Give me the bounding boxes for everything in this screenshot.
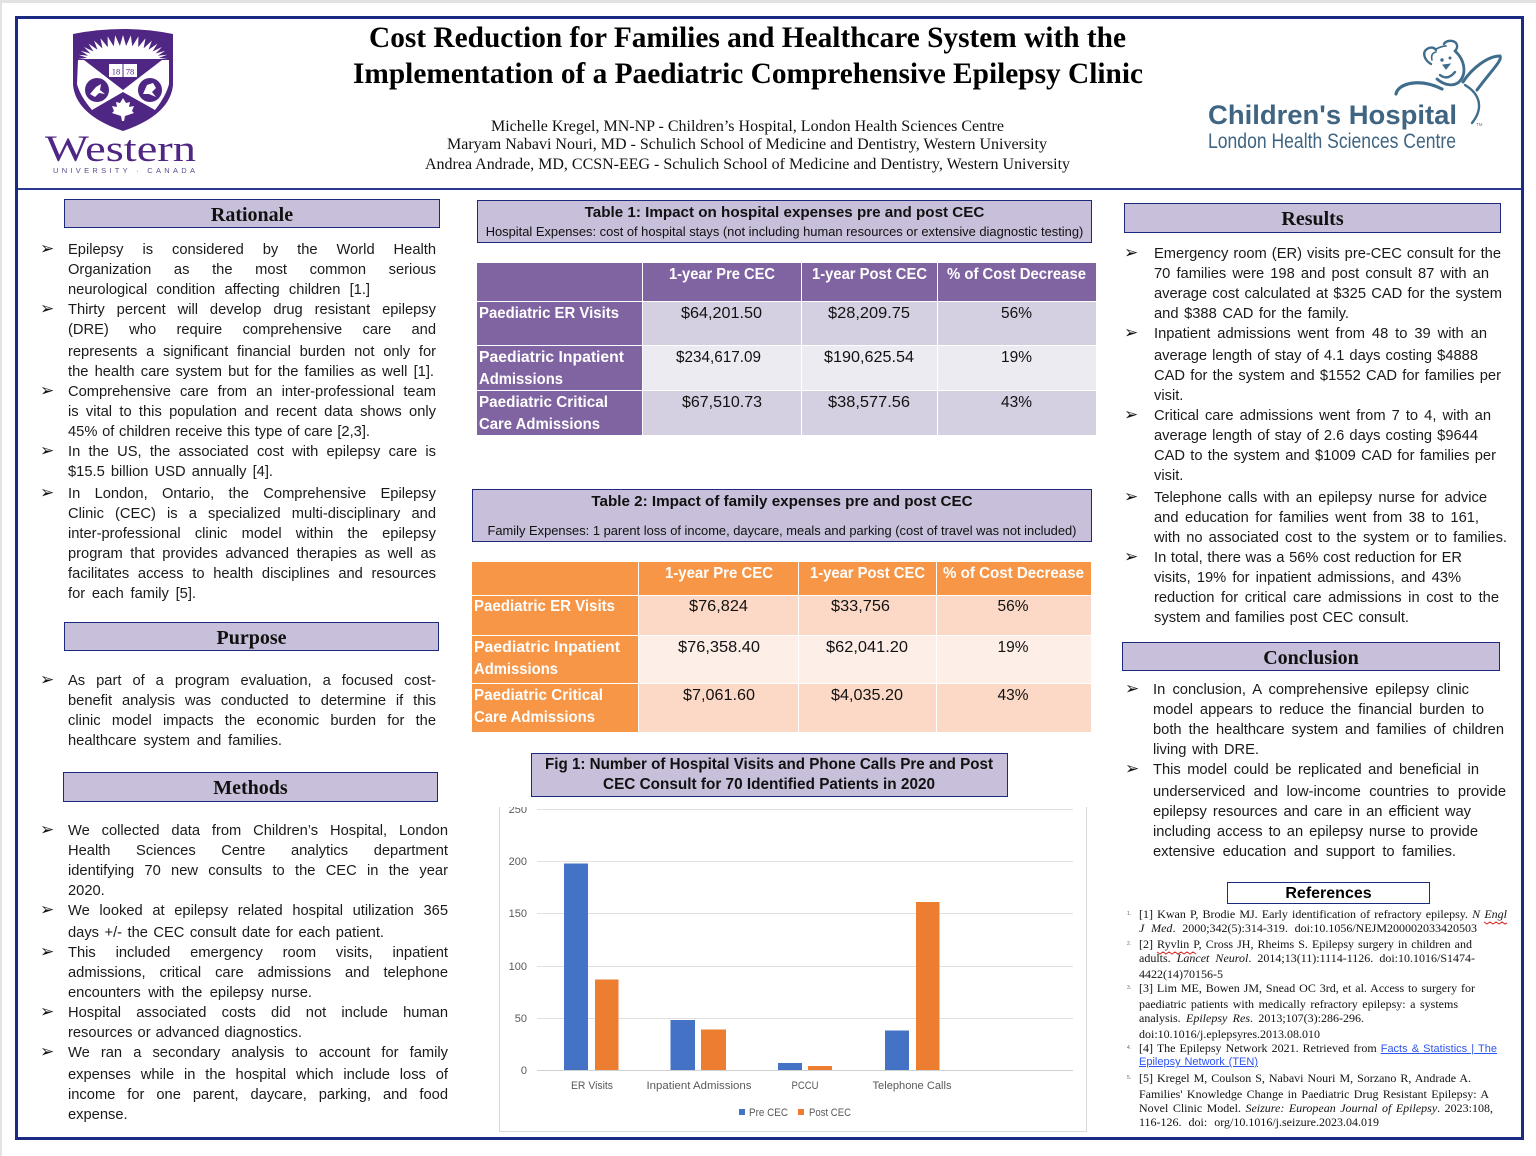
rationale bullet list: facilitates access to health disciplines and resources (68, 566, 436, 582)
table 1 row: inpatient admissions (479, 349, 1032, 388)
bar chart: hospital visits and phone calls (499, 804, 1087, 1132)
conclusion bullet list: ➢ (1125, 759, 1139, 779)
conclusion bullet list: In conclusion, A comprehensive epilepsy clinic (1153, 682, 1469, 698)
purpose bullet list: As part of a program evaluation, a focused cost- (68, 673, 436, 689)
reference list: adults. Lancet Neurol. 2014;13(11):1114-1126. doi:10.1016/S1474- (1139, 951, 1475, 965)
authors: Michelle Kregel, MN-NP - Children’s Hospital, London Health Sciences Centre (491, 118, 1004, 135)
methods bullet list: ➢ (40, 1042, 54, 1062)
table 1 header row (669, 266, 1086, 283)
results bullet list (1124, 243, 1507, 626)
reference list: 1. (1127, 911, 1131, 917)
authors: Maryam Nabavi Nouri, MD - Schulich School of Medicine and Dentistry, Western University (447, 136, 1047, 153)
results bullet list: average length of stay of 2.6 days costing $9644 (1154, 428, 1478, 444)
logo: Western University (45, 29, 196, 175)
conclusion bullet list: living with DRE. (1153, 742, 1259, 758)
table 2 row: inpatient admissions: Admissions (474, 661, 558, 678)
results bullet list: with no associated cost to the system or to families. (1154, 530, 1507, 546)
trademark: TM (1476, 122, 1483, 127)
heading: rationale: Rationale (211, 204, 293, 226)
table 1 row: inpatient admissions: Admissions (479, 371, 563, 388)
rationale bullet list (40, 239, 436, 602)
conclusion bullet list: including access to an epilepsy nurse to provide (1153, 824, 1478, 840)
heading: references: References (1285, 885, 1372, 902)
x axis labels: ER Visits (571, 1080, 613, 1092)
logo: Children's Hospital (1208, 40, 1502, 153)
heading: rationale (64, 199, 440, 228)
rationale bullet list: ➢ (40, 299, 54, 319)
heading: conclusion: Conclusion (1263, 647, 1359, 669)
reference list: paediatric patients with medically refractory epilepsy: a systems (1139, 997, 1458, 1011)
rationale bullet list: for each family [5]. (68, 586, 196, 602)
y axis labels: 100 (509, 961, 527, 973)
y axis labels: 150 (509, 908, 527, 920)
rationale bullet list: Thirty percent will develop drug resistant epilepsy (68, 302, 436, 318)
conclusion bullet list: underserviced and low-income countries to provide (1153, 784, 1506, 800)
icon: shield: 18 (112, 66, 120, 76)
table 2 subtitle: Family Expenses: 1 parent loss of income, daycare, meals and parking (cost of travel was not included) (488, 523, 1076, 538)
table 1 row: critical care admissions: $38,577.56 (828, 394, 910, 411)
rationale bullet list: ➢ (40, 239, 54, 259)
table 2 row: inpatient admissions: $76,358.40 (678, 639, 760, 656)
table 1 row: inpatient admissions: Paediatric Inpatient (479, 349, 625, 366)
table 1 row: ER visits: $28,209.75 (828, 305, 910, 322)
reference list: Families' Knowledge Change in Paediatric Drug Resistant Epilepsy: A (1139, 1087, 1489, 1101)
figure 1 heading: Fig 1: Number of Hospital Visits and Phone Calls Pre and Post (545, 756, 994, 773)
heading: methods (63, 772, 438, 802)
rationale bullet list: Clinic (CEC) is a specialized multi-disciplinary and (68, 506, 436, 522)
results bullet list: and $388 CAD for the family. (1154, 306, 1349, 322)
table 1 row: critical care admissions: Care Admissions (479, 416, 600, 433)
methods bullet list: ➢ (40, 820, 54, 840)
conclusion bullet list (1125, 679, 1506, 860)
panel: purpose (40, 622, 439, 749)
table 1 title: Table 1: Impact on hospital expenses pre and post CEC (585, 204, 984, 221)
table 2 row: ER visits (474, 598, 1029, 615)
table 2 row: inpatient admissions: Paediatric Inpatient (474, 639, 621, 656)
heading: purpose: Purpose (216, 627, 286, 649)
table 1 row: inpatient admissions: $190,625.54 (824, 349, 914, 366)
table 1: hospital expenses (477, 263, 1096, 435)
methods bullet list (40, 820, 448, 1123)
x axis labels: PCCU (792, 1080, 819, 1092)
table 2 title: Table 2: Impact of family expenses pre and post CEC (591, 493, 973, 510)
y axis labels: 200 (509, 856, 527, 868)
purpose bullet list: clinic model impacts the economic burden for the (68, 713, 436, 729)
title: Cost Reduction for Families and Healthcare System with the (369, 21, 1126, 54)
table 1 subtitle: Hospital Expenses: cost of hospital stays (not including human resources or extensive diagnostic testing) (486, 224, 1083, 239)
table 2 row: ER visits: Paediatric ER Visits (474, 598, 615, 615)
table 2 row: ER visits: $76,824 (689, 598, 748, 615)
heading: results (1124, 203, 1501, 233)
panel: conclusion (1122, 642, 1506, 860)
results bullet list: CAD for the system and $1552 CAD for families per (1154, 368, 1501, 384)
logo name: Children's Hospital (1208, 100, 1457, 130)
table 2 row: inpatient admissions (474, 639, 1029, 678)
methods bullet list: Hospital associated costs did not include human (68, 1005, 448, 1021)
rationale bullet list: inter-professional clinic model within the epilepsy (68, 526, 436, 542)
x axis labels: Telephone Calls (872, 1080, 952, 1092)
table 1 heading (477, 200, 1092, 243)
results bullet list: system and families post CEC consult. (1154, 610, 1409, 626)
table 1 header row: 1-year Pre CEC (669, 266, 775, 283)
table 1 row: critical care admissions (479, 394, 1032, 433)
reference list: [2] Ryvlin P, Cross JH, Rheims S. Epilepsy surgery in children and (1139, 937, 1472, 951)
conclusion bullet list: epilepsy resources and care in an efficient way (1153, 804, 1471, 820)
rationale bullet list: neurological condition affecting children [1.] (68, 282, 370, 298)
results bullet list: Telephone calls with an epilepsy nurse for advice (1154, 490, 1487, 506)
methods bullet list: We collected data from Children’s Hospital, London (68, 823, 448, 839)
reference list: 116-126. doi: org/10.1016/j.seizure.2023.04.019 (1139, 1115, 1379, 1129)
table 1 row: critical care admissions: $67,510.73 (682, 394, 762, 411)
rationale bullet list: ➢ (40, 441, 54, 461)
tagline: UNIVERSITY · CANADA (53, 166, 195, 175)
rationale bullet list: In the US, the associated cost with epilepsy care is (68, 444, 436, 460)
y axis labels: 250 (509, 804, 527, 816)
icon: shield: 78 (126, 66, 134, 76)
table 2 row: ER visits: $33,756 (831, 598, 890, 615)
methods bullet list: This included emergency room visits, inpatient (68, 945, 448, 961)
methods bullet list: encounters with the epilepsy nurse. (68, 985, 312, 1001)
table 1 row: ER visits (479, 305, 1032, 322)
conclusion bullet list: This model could be replicated and beneficial in (1153, 762, 1479, 778)
results bullet list: reduction for critical care admissions in cost to the (1154, 590, 1499, 606)
y axis labels: 0 (521, 1065, 527, 1077)
methods bullet list: We ran a secondary analysis to account for family (68, 1045, 448, 1061)
results bullet list: visit. (1154, 388, 1183, 404)
reference list: analysis. Epilepsy Res. 2013;107(3):286-296. (1139, 1011, 1364, 1025)
results bullet list: In total, there was a 56% cost reduction for ER (1154, 550, 1462, 566)
rationale bullet list: program that provides advanced therapies as well as (68, 546, 436, 562)
reference list: [4] The Epilepsy Network 2021. Retrieved from Facts & Statistics | The (1139, 1041, 1497, 1055)
methods bullet list: We looked at epilepsy related hospital utilization 365 (68, 903, 448, 919)
table 1 row: inpatient admissions: 19% (1001, 349, 1032, 366)
table 2 row: critical care admissions: $4,035.20 (831, 687, 903, 704)
table 2: family expenses (472, 562, 1091, 732)
table 2 row: critical care admissions: 43% (998, 687, 1029, 704)
conclusion bullet list: extensive education and support to families. (1153, 844, 1456, 860)
rationale bullet list: (DRE) who require comprehensive care and (68, 322, 436, 338)
results bullet list: Emergency room (ER) visits pre-CEC consult for the (1154, 246, 1501, 262)
title (353, 21, 1143, 90)
table 1 row: ER visits: 56% (1001, 305, 1032, 322)
rationale bullet list: 45% of children receive this type of care [2,3]. (68, 424, 370, 440)
methods bullet list: admissions, critical care admissions and telephone (68, 965, 448, 981)
methods bullet list: identifying 70 new consults to the CEC in the year (68, 863, 448, 879)
series: pre CEC bars (564, 864, 909, 1070)
legend (739, 1107, 851, 1119)
methods bullet list: days +/- the CEC consult date for each patient. (68, 925, 384, 941)
purpose bullet list: ➢ (40, 670, 54, 690)
table 2 row: critical care admissions: Care Admissions (474, 709, 595, 726)
table 1 row: ER visits: Paediatric ER Visits (479, 305, 619, 322)
rationale bullet list: is vital to this population and recent data shows only (68, 404, 436, 420)
x axis labels (571, 1080, 952, 1092)
conclusion bullet list: model appears to reduce the financial burden to (1153, 702, 1484, 718)
table 2 header row (665, 565, 1084, 582)
purpose bullet list (40, 670, 436, 749)
figure 1 heading: CEC Consult for 70 Identified Patients in 2020 (603, 776, 935, 793)
methods bullet list: expenses while in the hospital which include loss of (68, 1067, 448, 1083)
purpose bullet list: healthcare system and families. (68, 733, 282, 749)
results bullet list: ➢ (1124, 405, 1138, 425)
table 2 row: critical care admissions (474, 687, 1029, 726)
results bullet list: and education for families went from 38 to 161, (1154, 510, 1479, 526)
figure 1 heading (531, 753, 1008, 797)
authors (425, 118, 1070, 173)
x axis labels: Inpatient Admissions (646, 1080, 752, 1092)
legend: Post CEC (809, 1107, 851, 1119)
results bullet list: Critical care admissions went from 7 to 4, with an (1154, 408, 1491, 424)
title: Implementation of a Paediatric Comprehensive Epilepsy Clinic (353, 57, 1143, 90)
rationale bullet list: ➢ (40, 381, 54, 401)
reference list: [1] Kwan P, Brodie MJ. Early identification of refractory epilepsy. N Engl (1139, 907, 1507, 921)
results bullet list: visit. (1154, 468, 1183, 484)
rationale bullet list: represents a significant financial burden not only for (68, 344, 436, 360)
rationale bullet list: ➢ (40, 483, 54, 503)
wordmark: Western (45, 129, 196, 170)
reference list: Epilepsy Network (TEN) (1139, 1056, 1258, 1068)
methods bullet list: expense. (68, 1107, 128, 1123)
results bullet list: average length of stay of 4.1 days costing $4888 (1154, 348, 1478, 364)
reference list: 5. (1127, 1075, 1131, 1081)
y axis labels (509, 804, 527, 1077)
rationale bullet list: Comprehensive care from an inter-professional team (68, 384, 436, 400)
panel: rationale (40, 199, 440, 602)
results bullet list: ➢ (1124, 547, 1138, 567)
results bullet list: ➢ (1124, 243, 1138, 263)
reference list: J Med. 2000;342(5):314-319. doi:10.1056/NEJM200002033420503 (1139, 921, 1477, 935)
reference list: [3] Lim ME, Bowen JM, Snead OC 3rd, et al. Access to surgery for (1139, 981, 1475, 995)
purpose bullet list: benefit analysis was conducted to determine if this (68, 693, 436, 709)
heading: methods: Methods (213, 777, 288, 799)
reference list: 4. (1127, 1045, 1131, 1051)
conclusion bullet list: both the healthcare system and families of children (1153, 722, 1504, 738)
table 2 row: inpatient admissions: $62,041.20 (826, 639, 908, 656)
table 1 row: inpatient admissions: $234,617.09 (676, 349, 761, 366)
panel: methods (40, 772, 448, 1123)
table 1 header row: % of Cost Decrease (947, 266, 1086, 283)
table 2 row: inpatient admissions: 19% (998, 639, 1029, 656)
reference list (1127, 907, 1507, 1129)
panel: references (1127, 882, 1507, 1129)
panel: results (1124, 203, 1507, 626)
results bullet list: visits, 19% for inpatient admissions, and 43% (1154, 570, 1461, 586)
table 1 row: critical care admissions: 43% (1001, 394, 1032, 411)
reference list: [5] Kregel M, Coulson S, Nabavi Nouri M, Sorzano R, Andrade A. (1139, 1071, 1471, 1085)
rationale bullet list: the health care system but for the families as well [1]. (68, 364, 434, 380)
results bullet list: average cost calculated at $325 CAD for the system (1154, 286, 1502, 302)
results bullet list: ➢ (1124, 487, 1138, 507)
heading: purpose (64, 622, 439, 651)
reference list: doi:10.1016/j.eplepsyres.2013.08.010 (1139, 1027, 1320, 1041)
table 2 row: ER visits: 56% (998, 598, 1029, 615)
methods bullet list: ➢ (40, 900, 54, 920)
logo subtitle: London Health Sciences Centre (1208, 130, 1456, 153)
table 2 header row: % of Cost Decrease (943, 565, 1084, 582)
icon: shield (73, 29, 173, 131)
reference list: 2. (1127, 941, 1131, 947)
results bullet list: ➢ (1124, 323, 1138, 343)
rationale bullet list: $15.5 billion USD annually [4]. (68, 464, 273, 480)
icon: teddy bear (1396, 41, 1500, 123)
table 1 row: critical care admissions: Paediatric Critical (479, 394, 608, 411)
results bullet list: Inpatient admissions went from 48 to 39 with an (1154, 326, 1487, 342)
methods bullet list: 2020. (68, 883, 105, 899)
results bullet list: CAD to the system and $1009 CAD for families per (1154, 448, 1496, 464)
table 2 row: critical care admissions: $7,061.60 (683, 687, 755, 704)
reference list: Novel Clinic Model. Seizure: European Journal of Epilepsy. 2023:108, (1139, 1101, 1493, 1115)
authors: Andrea Andrade, MD, CCSN-EEG - Schulich School of Medicine and Dentistry, Western University (425, 156, 1070, 173)
conclusion bullet list: ➢ (1125, 679, 1139, 699)
reference list: 4422(14)70156-5 (1139, 967, 1223, 981)
rationale bullet list: Epilepsy is considered by the World Health (68, 242, 436, 258)
series: post CEC bars (595, 902, 940, 1070)
methods bullet list: income for one parent, daycare, parking, and food (68, 1087, 448, 1103)
rationale bullet list: In London, Ontario, the Comprehensive Epilepsy (68, 486, 436, 502)
methods bullet list: ➢ (40, 1002, 54, 1022)
table 2 heading (472, 489, 1092, 542)
legend: Pre CEC (749, 1107, 788, 1119)
table 2 header row: 1-year Post CEC (810, 565, 925, 582)
results bullet list: 70 families were 198 and post consult 87 with an (1154, 266, 1489, 282)
y axis labels: 50 (515, 1013, 527, 1025)
heading: conclusion (1122, 642, 1500, 671)
methods bullet list: ➢ (40, 942, 54, 962)
reference list: 3. (1127, 985, 1131, 991)
methods bullet list: Health Sciences Centre analytics department (68, 843, 448, 859)
table 1 row: ER visits: $64,201.50 (681, 305, 762, 322)
table 2 row: critical care admissions: Paediatric Critical (474, 687, 603, 704)
methods bullet list: resources or advanced diagnostics. (68, 1025, 302, 1041)
table 1 header row: 1-year Post CEC (812, 266, 927, 283)
table 2 header row: 1-year Pre CEC (665, 565, 773, 582)
heading: results: Results (1281, 208, 1344, 230)
rationale bullet list: Organization as the most common serious (68, 262, 436, 278)
heading: references (1227, 882, 1430, 904)
